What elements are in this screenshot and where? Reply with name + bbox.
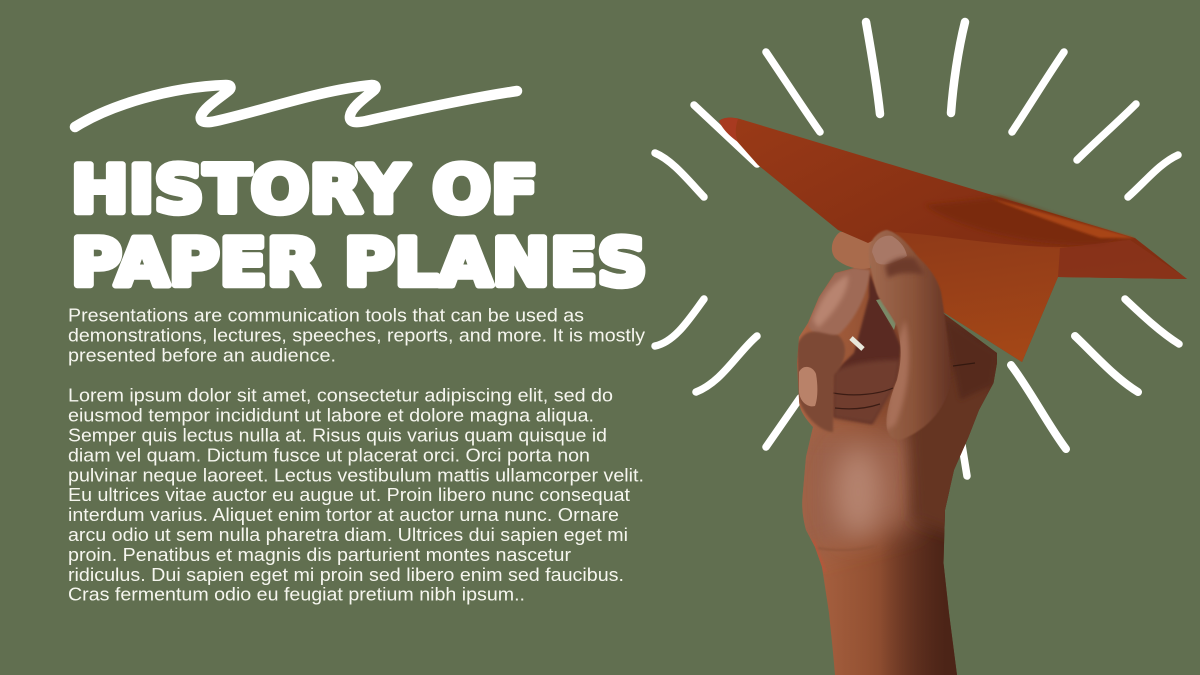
red wrist crease xyxy=(813,540,825,572)
lorem ipsum paragraph: pulvinar neque laoreet. Lectus vestibulum mattis ullamcorper velit. xyxy=(68,464,644,485)
lorem ipsum paragraph: eiusmod tempor incididunt ut labore et dolore magna aliqua. xyxy=(68,405,594,426)
lower wing panel xyxy=(895,232,1187,362)
intro paragraph: demonstrations, lectures, speeches, reports, and more. It is mostly xyxy=(68,325,646,346)
lorem ipsum paragraph: Cras fermentum odio eu feugiat pretium nibh ipsum.. xyxy=(68,584,525,605)
lorem ipsum paragraph: Lorem ipsum dolor sit amet, consectetur adipiscing elit, sed do xyxy=(68,385,613,406)
index finger highlight xyxy=(813,275,848,328)
lower curled fingers xyxy=(833,360,900,424)
knuckle crease xyxy=(953,363,975,366)
palm base colour xyxy=(802,424,922,544)
intro paragraph: Presentations are communication tools that can be used as xyxy=(68,305,584,326)
fingernail xyxy=(799,367,817,406)
ray seen through fingers xyxy=(851,338,863,349)
title: HISTORY OF xyxy=(71,153,538,228)
gap between fingers xyxy=(876,299,896,330)
wrist fold xyxy=(819,548,847,551)
lorem ipsum paragraph: diam vel quam. Dictum fusce ut placerat orci. Orci porta non xyxy=(68,444,590,465)
forearm shadow xyxy=(890,491,957,675)
title xyxy=(71,153,647,301)
thumb nail xyxy=(872,236,907,264)
plane nose xyxy=(719,118,738,142)
tail section xyxy=(1058,240,1187,279)
hand-drawn rays xyxy=(655,22,1179,476)
lorem ipsum paragraph: interdum varius. Aliquet enim tortor at auctor urna nunc. Ornare xyxy=(68,504,619,525)
lorem ipsum paragraph: Eu ultrices vitae auctor eu augue ut. Proin libero nunc consequat xyxy=(68,484,631,505)
decorative squiggle xyxy=(75,85,517,127)
back of hand shadow xyxy=(905,345,997,540)
intro paragraph: presented before an audience. xyxy=(68,345,336,366)
knuckle shade xyxy=(948,325,993,398)
title: PAPER PLANES xyxy=(71,226,647,301)
highlight along the top edge xyxy=(990,198,1135,238)
index finger xyxy=(808,268,870,337)
intro paragraph xyxy=(68,305,646,366)
thumb joint shadow xyxy=(885,257,925,278)
lorem ipsum paragraph xyxy=(68,385,644,605)
upper dark fold xyxy=(925,197,1120,245)
hand holding the plane xyxy=(797,232,997,675)
palm highlight xyxy=(834,448,882,536)
curled fingers cavity xyxy=(833,272,901,424)
lorem ipsum paragraph: arcu odio ut sem nulla pharetra diam. Ultrices dui sapien eget mi xyxy=(68,524,628,545)
middle finger xyxy=(797,332,845,432)
finger creases xyxy=(833,388,893,409)
paper plane xyxy=(719,118,1187,362)
lorem ipsum paragraph: Semper quis lectus nulla at. Risus quis varius quam quisque id xyxy=(68,424,607,446)
thumb lit ridge xyxy=(885,320,909,430)
lorem ipsum paragraph: proin. Penatibus et magnis dis parturient montes nascetur xyxy=(68,544,571,565)
lorem ipsum paragraph: ridiculus. Dui sapien eget mi proin sed libero enim sed faucibus. xyxy=(68,564,624,585)
first fingertip behind the plane xyxy=(832,232,874,269)
thumb xyxy=(869,230,951,440)
